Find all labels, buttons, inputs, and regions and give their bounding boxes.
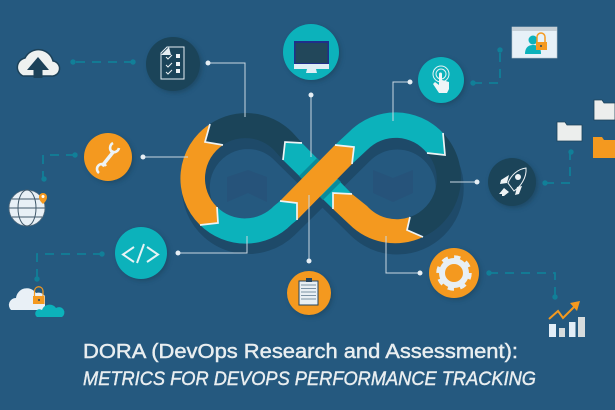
icon: bar chart — [549, 301, 585, 337]
crossing shade upper — [299, 158, 320, 179]
dashed connector dots — [34, 47, 574, 300]
subheading line: METRICS FOR DEVOPS PERFORMANCE TRACKING — [83, 369, 536, 390]
segment: teal crossing — [283, 142, 352, 209]
connector lines — [143, 63, 477, 273]
icon: touch — [418, 57, 466, 105]
hole emblem right — [373, 170, 413, 202]
segment: dark upper left — [205, 113, 302, 160]
crossing shade lower — [320, 179, 341, 200]
connector dots — [140, 60, 480, 276]
segment: dark right — [407, 133, 461, 237]
icon: browser lock — [512, 27, 557, 58]
icon: checklist — [146, 37, 202, 93]
dashed connectors — [37, 50, 570, 297]
loop shadow — [196, 135, 450, 240]
icon: folder orange — [593, 137, 615, 158]
white chevrons — [200, 124, 445, 237]
icon: rocket — [488, 158, 538, 208]
infinity loop — [180, 112, 461, 244]
segment: teal lower left — [200, 201, 297, 244]
map pin — [39, 193, 47, 204]
segment: orange diagonal — [280, 145, 354, 220]
segment: orange lower right — [333, 193, 423, 243]
icon: folder white — [594, 100, 615, 120]
icon: monitor — [283, 24, 341, 82]
icon: code — [115, 227, 169, 281]
icon: globe — [9, 190, 47, 226]
icon: gear — [429, 248, 481, 300]
title — [83, 341, 536, 390]
heading line: DORA (DevOps Research and Assessment): — [83, 341, 518, 363]
icon: folder white small — [557, 122, 582, 141]
icon: cloud lock — [9, 287, 64, 317]
hole emblem left — [227, 170, 267, 202]
icon: clipboard — [287, 271, 333, 317]
segment: orange left — [180, 124, 223, 225]
icon: wrench — [84, 133, 134, 183]
icon: cloud upload — [17, 50, 60, 78]
segment: teal upper right — [335, 112, 445, 164]
